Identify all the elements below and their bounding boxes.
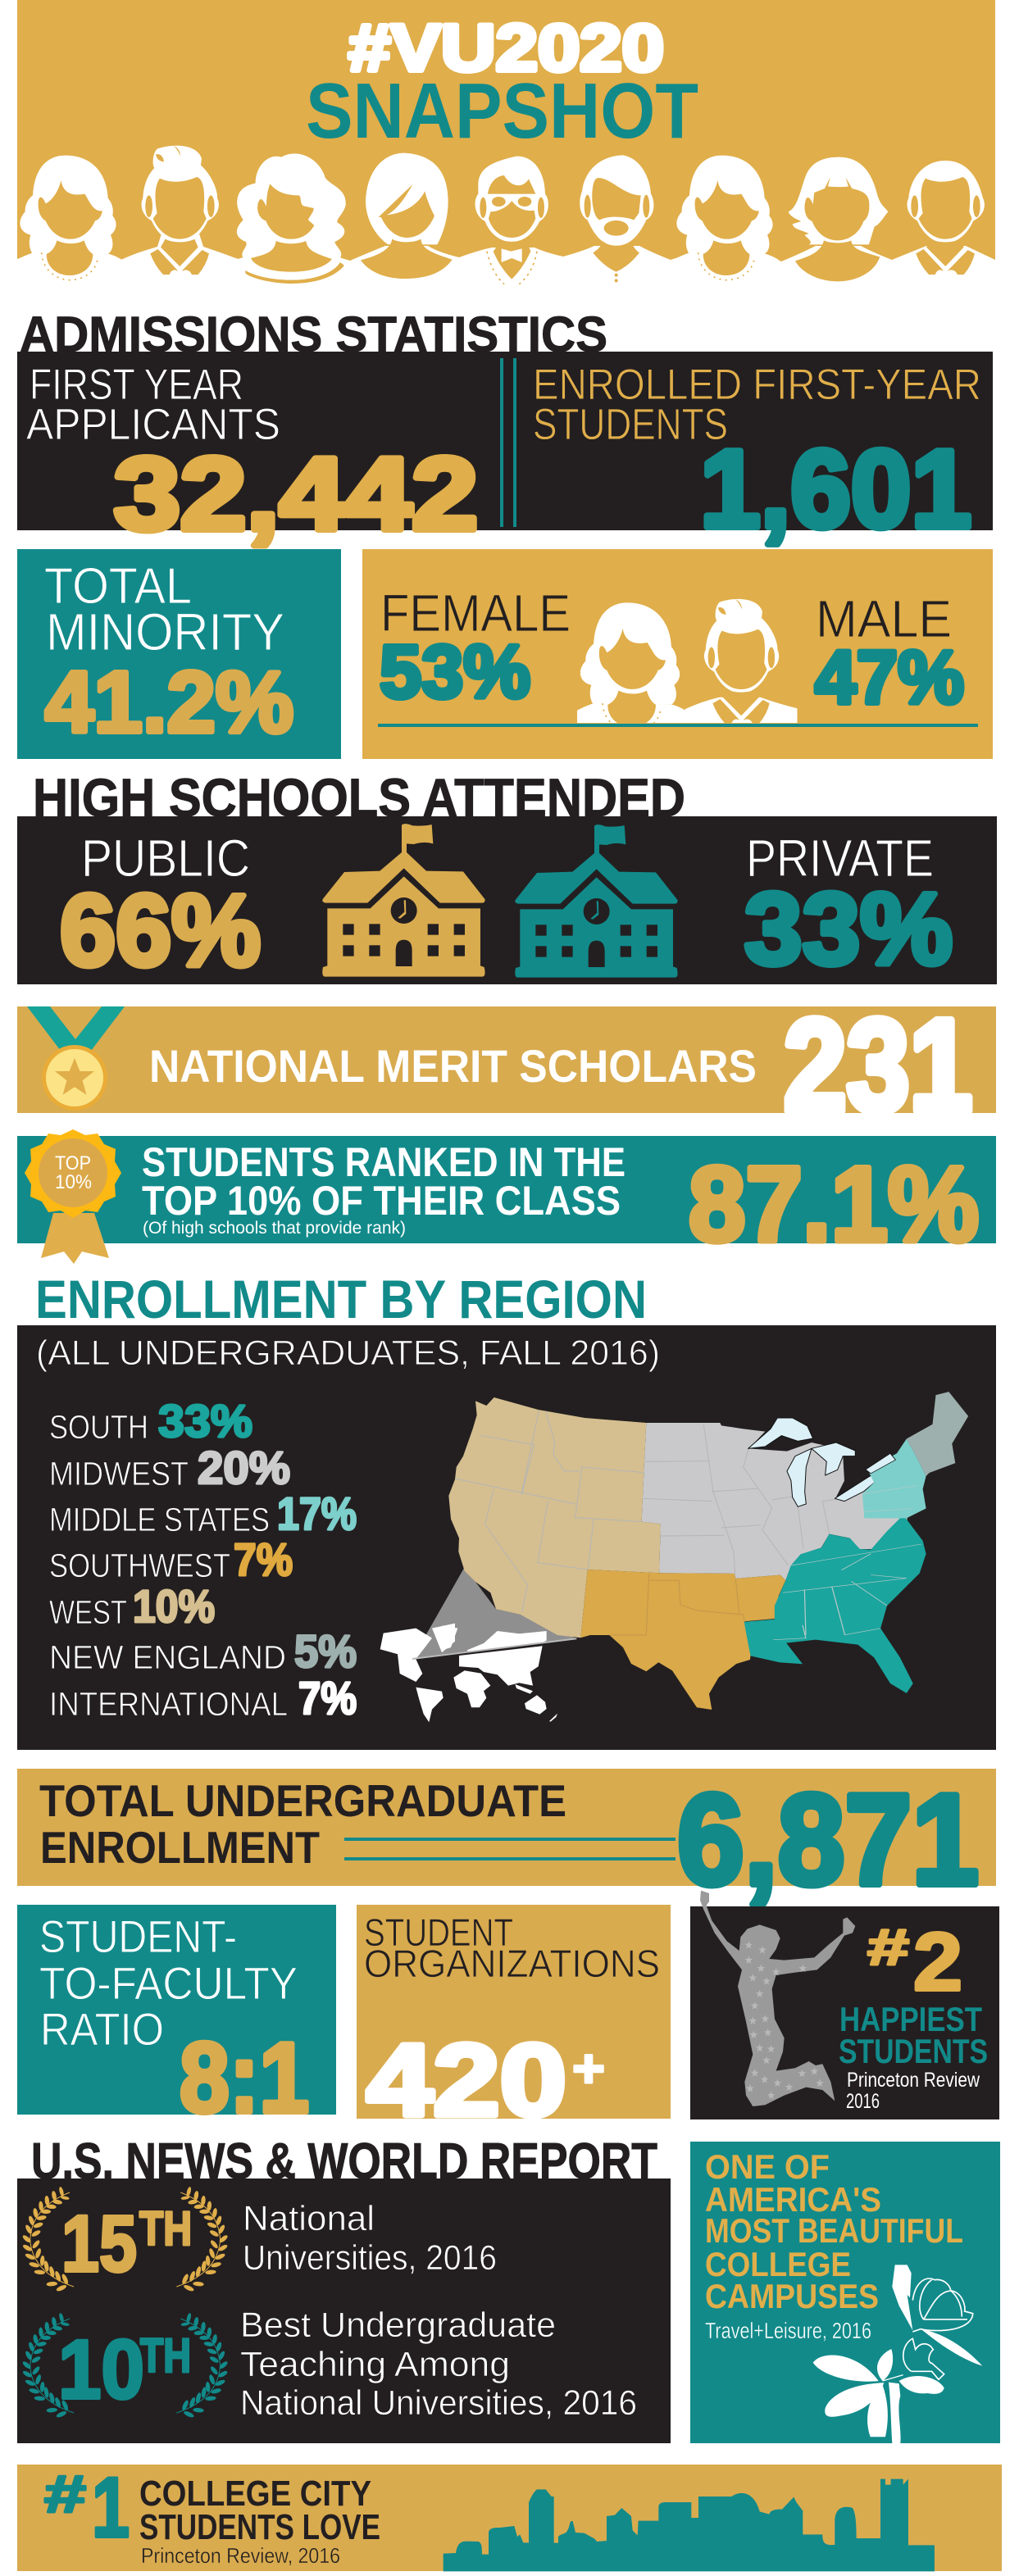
panel: most beautiful campuses: CAMPUSES [705, 2277, 879, 2315]
source: princeton review: Princeton Review [847, 2069, 980, 2092]
stat: #1: 1 [92, 2460, 130, 2556]
legend: regions: MIDDLE STATES [49, 1501, 270, 1538]
label: college city students love: COLLEGE CITY [139, 2474, 371, 2514]
legend: regions: SOUTHWEST [49, 1547, 230, 1584]
label: college city students love: STUDENTS LOVE [139, 2507, 380, 2547]
panel: national merit scholars [17, 992, 996, 1138]
stat: 53%: 53% [380, 630, 530, 714]
panel: gender split [362, 549, 993, 759]
legend: regions: 17% [277, 1488, 357, 1539]
stat: 32,442: 32,442 [114, 436, 478, 552]
heading: admissions statistics: ADMISSIONS STATISTICS [20, 307, 607, 362]
panel: most beautiful campuses [690, 2142, 1000, 2443]
label: public: PUBLIC [81, 829, 250, 888]
panel: u.s. news rankings [17, 2178, 671, 2443]
ranking: 15th: 15 [61, 2199, 137, 2288]
panel: admissions [17, 352, 993, 552]
panel: enrollment by region [17, 1325, 996, 1750]
region: west [448, 1397, 661, 1638]
legend: regions: 33% [158, 1395, 252, 1447]
stat: 6,871: 6,871 [677, 1768, 979, 1912]
icon: female and male figures [577, 599, 797, 734]
legend: regions: INTERNATIONAL [49, 1685, 288, 1723]
label: happiest students: STUDENTS [839, 2032, 988, 2070]
panel: number one college city [17, 2460, 1002, 2571]
stat: 1,601: 1,601 [700, 427, 971, 551]
panel: total minority [17, 549, 341, 759]
heading: u.s. news and world report: U.S. NEWS & WORLD REPORT [31, 2133, 657, 2190]
icon: rosette badge: 10% [55, 1171, 92, 1193]
ranking: 15th: TH [139, 2202, 192, 2256]
icon: jumping student [700, 1891, 855, 2106]
label: male: MALE [816, 589, 952, 648]
label: first year applicants [26, 361, 280, 449]
stat: 41.2%: 41.2% [45, 654, 293, 751]
ranking: 10th: TH [140, 2329, 191, 2383]
label: happiest students: HAPPIEST [839, 2000, 982, 2038]
note: rank caveat: (Of high schools that provide rank) [143, 1219, 406, 1238]
panel: total minority: MINORITY [46, 602, 284, 661]
map: united states regions [448, 1392, 968, 1710]
legend: regions: 20% [198, 1442, 290, 1493]
panel: most beautiful campuses: ONE OF [705, 2147, 830, 2186]
panel: most beautiful campuses: AMERICA'S [705, 2180, 881, 2219]
stat: #2: # [867, 1920, 909, 1976]
panel: most beautiful campuses: COLLEGE [705, 2245, 851, 2283]
illustration: row of student portraits [17, 146, 995, 295]
panel: top 10 percent [17, 1129, 996, 1264]
ranking: 10th: Teaching Among [240, 2345, 510, 2384]
panel: total undergraduate enrollment [17, 1768, 996, 1912]
ranking: 10th: 10 [58, 2323, 144, 2416]
panel: student to faculty ratio: RATIO [40, 2003, 164, 2055]
icon: rosette badge: TOP [55, 1152, 91, 1174]
legend: regions: MIDWEST [49, 1455, 189, 1492]
icon: rosette badge [25, 1129, 121, 1264]
label: national merit scholars: NATIONAL MERIT SCHOLARS [149, 1040, 757, 1092]
panel: student organizations [357, 1905, 671, 2138]
lake ontario [866, 1453, 895, 1474]
legend: regions: 10% [133, 1580, 215, 1632]
legend: regions [49, 1395, 357, 1724]
panel: student to faculty ratio: STUDENT- [39, 1910, 237, 1962]
legend: regions: 5% [294, 1625, 357, 1677]
map: world inset for international [380, 1568, 576, 1722]
label: first year applicants: FIRST YEAR [30, 361, 243, 409]
icon: private school [515, 825, 678, 978]
stat: 420+: + [572, 2038, 605, 2098]
ranking: 10th: Best Undergraduate [240, 2306, 556, 2345]
stat: 47%: 47% [815, 636, 964, 720]
stat: #2 [867, 1916, 962, 2008]
label: enrolled first-year students: STUDENTS [533, 400, 728, 449]
ranking: 15th: National [243, 2199, 375, 2238]
source: princeton review [846, 2069, 980, 2113]
label: students ranked [142, 1139, 626, 1224]
stat: 420+: 420 [366, 2024, 566, 2138]
lakes [748, 1418, 880, 1506]
title: #VU2020: #VU2020 [348, 11, 664, 85]
panel: header banner [17, 0, 995, 295]
label: enrolled first-year students [533, 361, 981, 449]
ranking: 10th: National Universities, 2016 [240, 2383, 637, 2423]
legend: regions: 7% [234, 1533, 293, 1585]
panel: student to faculty ratio [17, 1905, 336, 2133]
label: students ranked: STUDENTS RANKED IN THE [142, 1139, 626, 1185]
ranking: 10th [21, 2306, 637, 2423]
stat: #2: 2 [913, 1916, 962, 2008]
ranking: 15th [21, 2187, 497, 2292]
panel: student to faculty ratio: TO-FACULTY [39, 1957, 298, 2009]
label: happiest students [839, 2000, 988, 2070]
stat: 8:1: 8:1 [180, 2022, 309, 2133]
subheading: all undergraduates: (ALL UNDERGRADUATES, FALL 2016) [36, 1333, 660, 1373]
region: new england [907, 1392, 968, 1476]
stat: #1: # [44, 2465, 86, 2524]
illustration: magnolia [813, 2265, 982, 2443]
icon: medal [27, 1006, 125, 1111]
ranking: 15th: Universities, 2016 [243, 2238, 497, 2278]
label: students ranked: TOP 10% OF THEIR CLASS [142, 1178, 621, 1224]
region: south [744, 1515, 926, 1693]
stat: 33%: 33% [744, 873, 953, 986]
label: total undergraduate enrollment: ENROLLMENT [40, 1822, 320, 1873]
legend: regions: WEST [49, 1593, 127, 1631]
stat: 231: 231 [784, 992, 972, 1138]
panel: total minority: TOTAL [44, 558, 192, 615]
source: princeton review: 2016 [846, 2090, 880, 2113]
heading: enrollment by region: ENROLLMENT BY REGION [35, 1269, 647, 1329]
panel: student organizations: ORGANIZATIONS [364, 1942, 660, 1985]
region: southwest [580, 1570, 785, 1710]
label: private: PRIVATE [746, 829, 934, 888]
source: princeton review 2016: Princeton Review, 2016 [141, 2543, 340, 2568]
label: total undergraduate enrollment: TOTAL UNDERGRADUATE [39, 1775, 566, 1826]
stat: 87.1%: 87.1% [689, 1144, 979, 1264]
panel: happiest students [690, 1891, 999, 2119]
label: first year applicants: APPLICANTS [26, 400, 280, 449]
panel: student organizations: STUDENT [364, 1910, 513, 1954]
stat: #1 [44, 2460, 130, 2556]
illustration: nashville skyline [444, 2479, 935, 2571]
label: total undergraduate enrollment [39, 1775, 566, 1873]
label: college city students love [139, 2474, 380, 2547]
legend: regions: SOUTH [49, 1408, 148, 1446]
legend: regions: 7% [298, 1672, 357, 1724]
title: snapshot: SNAPSHOT [306, 67, 698, 155]
region: middle states [862, 1438, 926, 1518]
source: travel and leisure: Travel+Leisure, 2016 [705, 2318, 871, 2343]
panel: high schools [17, 816, 997, 988]
stat: 66%: 66% [60, 875, 261, 988]
region: midwest [642, 1423, 908, 1580]
panel: most beautiful campuses: MOST BEAUTIFUL [705, 2211, 963, 2250]
icon: public school [322, 824, 485, 977]
label: female: FEMALE [380, 584, 571, 643]
legend: regions: NEW ENGLAND [49, 1638, 286, 1676]
heading: high schools attended: HIGH SCHOOLS ATTENDED [33, 767, 685, 828]
